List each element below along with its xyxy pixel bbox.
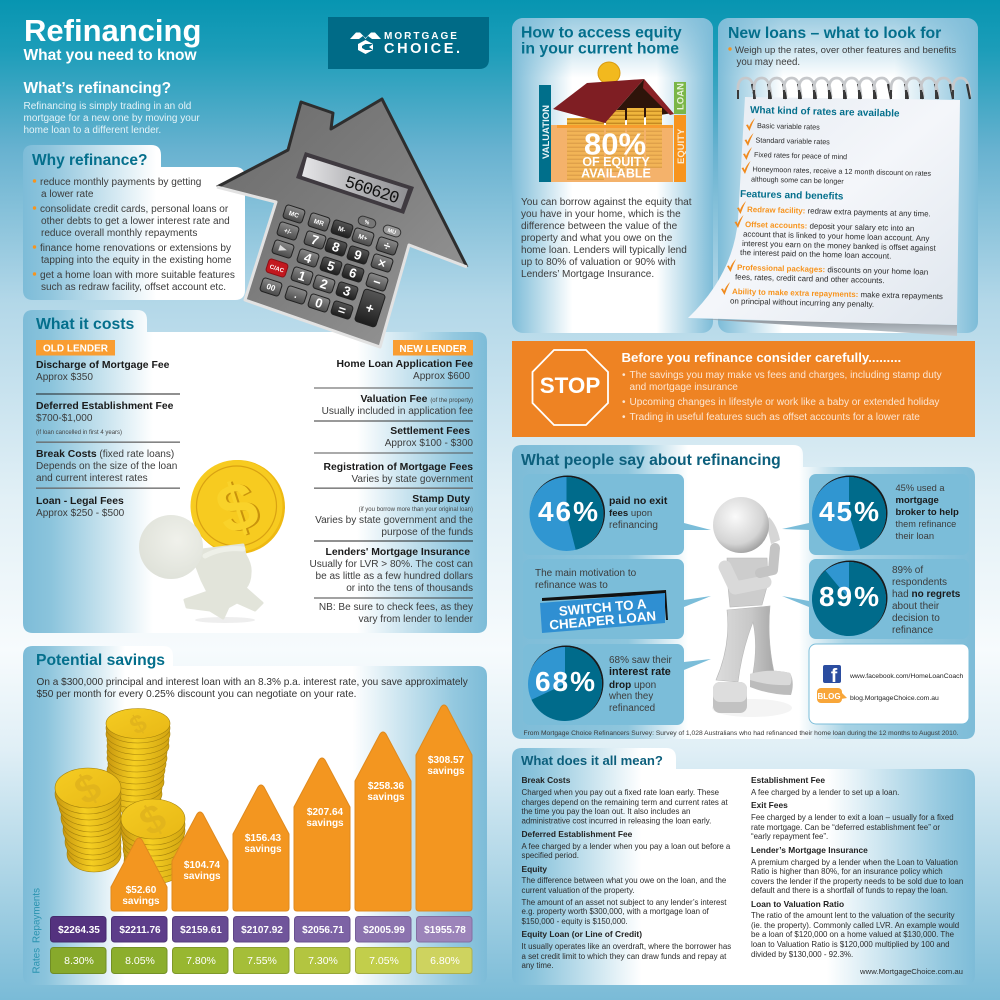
calculator keys: MC	[288, 210, 300, 220]
callout: 46%: fees upon	[609, 508, 652, 519]
new lender column: Valuation Fee (of the property)	[360, 394, 473, 405]
chart labels: savings amounts: savings	[306, 818, 344, 829]
checklist: features and benefits: Ability to make extra repayments: make extra repayments	[732, 287, 943, 301]
panel: what people say	[512, 445, 975, 739]
logo: Mortgage Choice	[328, 17, 489, 69]
old lender column: $700-$1,000	[36, 413, 93, 424]
row: repayments	[50, 916, 472, 942]
row: repayments: $2056.71	[302, 925, 344, 936]
icon: stop sign: STOP	[540, 373, 600, 398]
heading: why refinance: Why refinance?	[32, 152, 147, 169]
calculator keys: M+	[357, 233, 368, 243]
heading: how to access equity	[521, 24, 682, 58]
glossary: right column: (ie. the property). Commonly called LVR. An example would	[751, 921, 959, 930]
text: before you refinance: Trading in useful features such as offset accounts for a lower rate	[630, 412, 920, 423]
text: refinancing definition: home loan to a different lender.	[24, 125, 161, 136]
callout: 68%: drop upon	[609, 680, 656, 691]
calculator keys: 6	[347, 265, 359, 281]
glossary: left column: charges depend on the remaining term and current rates at	[522, 798, 728, 807]
list: reasons to refinance: tapping into the equity in the existing home	[41, 255, 232, 266]
callout: 89%: 89% of	[892, 565, 923, 576]
calculator keys: 2	[318, 276, 330, 292]
text: savings intro: $50 per month for every 0.25% discount you can negotiate on your rate.	[36, 689, 356, 700]
text: savings intro: On a $300,000 principal and interest loan with an 8.3% p.a. interest rate, you save approximately	[36, 677, 469, 688]
glossary: left column: $150,000 - equity is $150,000.	[522, 917, 628, 926]
calculator keys: 5	[325, 258, 337, 274]
text: savings intro	[36, 677, 469, 700]
calculator keys: 00	[265, 282, 277, 293]
row: rates: 7.55%	[247, 955, 277, 967]
chart labels: savings amounts: savings	[183, 871, 221, 882]
checklist: rates available: Basic variable rates	[757, 121, 820, 132]
glossary: right column: Establishment Fee	[751, 775, 825, 785]
calculator keys: ×	[376, 255, 388, 271]
panel: what it costs	[23, 310, 487, 633]
glossary: left column: Charged when you pay out a fixed rate loan early. These	[522, 788, 720, 797]
calculator keys: −	[371, 274, 383, 290]
old lender column: Approx $350	[36, 372, 93, 383]
glossary: right column: divided by $130,000 - 92.3%.	[751, 950, 853, 959]
row: rates: 7.05%	[369, 955, 399, 967]
old lender column: Depends on the size of the loan	[36, 461, 177, 472]
list: reasons to refinance	[33, 177, 235, 293]
glossary: right column: Exit Fees	[751, 800, 788, 810]
new lender column: NB: Be sure to check fees, as they	[319, 602, 473, 613]
coin dollar signs: $	[67, 764, 109, 814]
old lender column	[36, 340, 180, 519]
text: weigh up the rates: Weigh up the rates, over other features and benefits	[735, 45, 956, 56]
row: rates	[50, 948, 472, 974]
logo: Mortgage Choice: CHOICE.	[384, 41, 463, 57]
illustration: house with 80% equity	[539, 62, 687, 182]
title block: What you need to know	[24, 47, 198, 64]
calculator keys: +/-	[283, 227, 292, 236]
chart labels: savings amounts	[122, 755, 465, 907]
text: equity explanation: difference between the value of the	[521, 221, 678, 232]
checklist: rates available: Fixed rates for peace of mind	[754, 150, 847, 161]
list: reasons to refinance: get a home loan with more suitable features	[40, 270, 235, 281]
glossary: left column: a set credit limit to which they can draw funds and repay at	[522, 952, 727, 961]
footnote: survey source: From Mortgage Choice Refinancers Survey: Survey of 1,028 Australians who had refinanced their home loan during the 12 months to August 2010.	[524, 730, 959, 737]
new lender column: or into the tens of thousands	[346, 583, 473, 594]
new lender column: (if you borrow more than your original loan)	[359, 507, 473, 513]
callout: 68%: when they	[608, 691, 653, 702]
chart labels: savings amounts: $104.74	[184, 860, 221, 871]
logo: Mortgage Choice: MORTGAGE	[384, 31, 459, 42]
illustration: house with 80% equity: 80%	[584, 126, 646, 162]
calculator display: 560620	[342, 174, 401, 209]
panel: how to access equity	[512, 18, 713, 333]
callout: 89%: refinance	[892, 625, 934, 636]
calculator keys: MU	[387, 228, 397, 236]
coin dollar signs: $	[124, 707, 152, 741]
glossary: right column: Fee charged by a lender to exit a loan – usually for a fixed	[751, 813, 954, 822]
illustration: house-shaped calculator	[217, 99, 467, 347]
callout: switch to a cheaper loan	[523, 559, 711, 639]
checklist: rates available: Honeymoon rates, receive a 12 month discount on rates	[752, 165, 932, 178]
list: reasons to refinance: finance home renovations or extensions by	[40, 243, 231, 254]
old lender column: Break Costs (fixed rate loans)	[36, 449, 174, 460]
callout: 45%	[782, 474, 969, 555]
new lender column: Varies by state government and the	[315, 515, 473, 526]
new lender column: Lenders' Mortgage Insurance	[325, 547, 470, 558]
glossary: right column: default and there is a shortfall of funds to repay the loan.	[751, 886, 948, 895]
callout: 68%: interest rate	[609, 666, 671, 678]
text: equity explanation: home loan. Lenders will typically lend	[521, 245, 687, 256]
text: before you refinance: •	[622, 397, 626, 408]
calculator keys: MR	[313, 218, 325, 228]
calculator keys	[259, 204, 402, 328]
glossary: right column	[751, 775, 963, 959]
chart labels: savings amounts: $52.60	[126, 885, 157, 896]
callout: 68%: 68% saw their	[609, 655, 672, 666]
new lender column: Stamp Duty	[412, 494, 470, 505]
callout: switch to a cheaper loan: The main motivation to	[535, 568, 637, 579]
icon: blog	[817, 688, 847, 703]
icon: facebook	[823, 665, 841, 687]
callout: 68%	[523, 644, 711, 725]
illustration: figure carrying coin	[139, 460, 285, 623]
glossary: left column: The amount of an asset not subject to any lender’s interest	[522, 898, 727, 907]
text: before you refinance: The savings you may make vs fees and charges, including stamp duty	[630, 370, 942, 381]
glossary: right column: rate mortgage. Can be “deferred establishment fee” or	[751, 823, 940, 832]
callout: 45%: 45% used a	[896, 483, 945, 493]
calculator keys: .	[293, 290, 299, 301]
glossary: left column: Break Costs	[522, 775, 571, 785]
glossary: right column: loan to Valuation Ratio is $120,000 multiplied by 100 and	[751, 940, 950, 949]
callout: 89%: had no regrets	[892, 589, 961, 600]
text: weigh up the rates	[728, 45, 956, 68]
panel: social links: blog.MortgageChoice.com.au	[850, 695, 939, 702]
checklist: features and benefits: Features and benefits	[740, 189, 844, 203]
row: rates: 8.30%	[64, 955, 94, 967]
glossary: left column: the time you pay the loan out. It also includes an	[522, 807, 690, 816]
glossary: right column: Lender’s Mortgage Insurance	[751, 845, 868, 855]
illustration: house with 80% equity: EQUITY	[676, 128, 687, 164]
glossary: right column: Loan to Valuation Ratio	[751, 899, 844, 909]
illustration: house with 80% equity: LOAN	[676, 83, 686, 110]
glossary: right column: covers the lender if the property needs to be sold due to loan	[751, 877, 963, 886]
old lender column: Approx $250 - $500	[36, 508, 125, 519]
text: before you refinance: and mortgage insurance	[630, 382, 738, 393]
calculator keys: 4	[302, 250, 314, 266]
heading: new loans: New loans – what to look for	[728, 25, 941, 42]
illustration: figure carrying coin: $	[207, 466, 267, 550]
heading: potential savings: Potential savings	[36, 652, 165, 669]
calculator keys: =	[336, 302, 348, 318]
new lender column	[309, 340, 474, 625]
checklist: features and benefits: interest you earn on the money banked is offset against	[742, 239, 937, 253]
checklist: features and benefits	[721, 189, 943, 309]
callout: 89%: about their	[892, 601, 940, 612]
checklist: features and benefits: account that is linked to your home loan account. Any	[743, 230, 930, 243]
checklist: features and benefits: on principal without incurring any penalty.	[730, 297, 874, 309]
callout: 68%: 68%	[535, 666, 597, 697]
callout: 46%: refinancing	[609, 520, 658, 531]
checklist: features and benefits: fees, rates, credit card and other accounts.	[735, 273, 885, 285]
row: rates: 7.80%	[186, 955, 216, 967]
checklist: features and benefits: Professional packages: discounts on your home loan	[737, 263, 928, 277]
text: weigh up the rates: you may need.	[736, 57, 800, 68]
heading: what people say: What people say about refinancing	[521, 452, 781, 469]
glossary: left column: administrative cost incurred in releasing the loan early.	[522, 816, 711, 826]
text: before you refinance: Upcoming changes in lifestyle or work like a baby or extended holiday	[630, 397, 939, 408]
glossary: left column: Deferred Establishment Fee	[522, 829, 633, 839]
row: repayments: $2264.35	[58, 925, 100, 936]
callout: 45%: them refinance	[896, 519, 956, 529]
callout: 89%	[782, 559, 969, 639]
list: reasons to refinance: reduce overall monthly repayments	[41, 228, 197, 239]
text: refinancing definition	[24, 101, 200, 136]
new lender column: be as little as a few hundred dollars	[316, 571, 473, 582]
new lender column: Usually included in application fee	[322, 406, 473, 417]
text: before you refinance: •	[622, 370, 626, 381]
text: equity explanation: property and what you owe on the	[521, 233, 673, 244]
text: equity explanation	[521, 197, 692, 280]
calculator keys: %	[363, 219, 370, 227]
panel: why refinance	[23, 145, 245, 300]
old lender column: and current interest rates	[36, 473, 148, 484]
old lender column: Discharge of Mortgage Fee	[36, 360, 170, 371]
axis labels	[32, 888, 42, 974]
glossary: left column: Equity	[522, 864, 547, 874]
list: reasons to refinance: such as redraw facility, offset account etc.	[41, 282, 226, 293]
row: repayments: $2005.99	[363, 925, 405, 936]
axis labels: Rates	[32, 948, 42, 974]
panel: stop warning	[512, 341, 975, 437]
glossary: left column: The difference between what you owe on the loan, and the	[522, 876, 727, 885]
text: equity explanation: up to 80% of valuation or 90% with	[521, 257, 676, 268]
chart labels: savings amounts: $308.57	[428, 755, 465, 766]
notebook rings	[738, 78, 970, 99]
coin dollar signs: $	[132, 795, 174, 845]
new lender column: Approx $100 - $300	[385, 438, 473, 449]
text: refinancing definition: mortgage for a new one by moving your	[24, 113, 200, 124]
row: repayments: $1955.78	[424, 925, 466, 936]
calculator keys: M-	[337, 225, 346, 234]
calculator keys: 1	[296, 268, 308, 284]
callout: 89%: respondents	[892, 577, 947, 588]
callout: 45%: mortgage	[896, 495, 939, 506]
text: before you refinance: Before you refinance consider carefully.........	[622, 350, 901, 365]
heading: what's refinancing: What’s refinancing?	[24, 80, 171, 97]
illustration: house with 80% equity: VALUATION	[541, 105, 552, 159]
calculator keys: ÷	[382, 238, 393, 254]
callout: 45%: 45%	[819, 496, 881, 527]
row: repayments: $2211.76	[119, 925, 161, 936]
illustration: house with 80% equity: AVAILABLE	[581, 166, 651, 180]
checklist: features and benefits: Offset accounts: deposit your salary etc into an	[745, 220, 914, 233]
calculator keys: C/AC	[269, 264, 285, 275]
checklist: features and benefits: Redraw facility: redraw extra payments at any time.	[747, 205, 931, 218]
text: before you refinance: •	[622, 412, 626, 423]
text: refinancing definition: Refinancing is simply trading in an old	[24, 101, 191, 112]
chart labels: savings amounts: $258.36	[368, 781, 405, 792]
illustration: house with 80% equity: OF EQUITY	[582, 155, 650, 169]
chart labels: savings amounts: savings	[244, 844, 282, 855]
calculator keys: 8	[330, 239, 342, 255]
checklist: rates available: although some can be longer	[751, 175, 844, 186]
heading: how to access equity: How to access equity	[521, 24, 682, 42]
coin dollar signs	[67, 707, 174, 845]
checklist: features and benefits: the interest paid on the home loan account.	[740, 248, 891, 261]
new lender column: purpose of the funds	[381, 527, 473, 538]
callout: 89%: decision to	[892, 613, 940, 624]
heading: what does it all mean: What does it all mean?	[521, 753, 663, 768]
axis labels: Repayments	[32, 888, 42, 943]
old lender column: (if loan cancelled in first 4 years)	[36, 430, 122, 436]
glossary: left column: e.g. property worth $300,000, with a mortgage loan of	[522, 907, 710, 916]
heading: how to access equity: in your current home	[521, 40, 679, 58]
list: reasons to refinance: other debts to get a lower interest rate and	[41, 216, 230, 227]
row: repayments: $2159.61	[180, 925, 222, 936]
old lender column: Loan - Legal Fees	[36, 496, 124, 507]
checklist: rates available: What kind of rates are available	[750, 105, 900, 120]
glossary: left column	[522, 775, 731, 970]
row: rates: 6.80%	[430, 955, 460, 967]
callout: switch to a cheaper loan: refinance was to	[535, 580, 608, 591]
panel: social links	[809, 644, 969, 724]
glossary: left column: A fee charged by a lender when you pay a loan out before a	[522, 842, 731, 851]
callout: 46%: 46%	[538, 496, 600, 527]
checklist: rates available: Standard variable rates	[755, 136, 830, 146]
calculator keys: 7	[309, 232, 321, 248]
chart labels: savings amounts: $207.64	[307, 807, 344, 818]
new lender column: Approx $600	[413, 371, 470, 382]
illustration: thinking figure	[712, 497, 793, 717]
new lender column: Home Loan Application Fee	[337, 359, 473, 370]
callout: 45%: broker to help	[896, 507, 959, 518]
glossary: right column: “early repayment fee”.	[751, 832, 828, 841]
illustration: figure carrying coin: $	[210, 466, 269, 550]
row: rates: 7.30%	[308, 955, 338, 967]
title block	[24, 13, 201, 64]
glossary: left column: any time.	[522, 961, 554, 970]
callout: switch to a cheaper loan: SWITCH TO A	[558, 596, 647, 619]
illustration: coin stacks	[55, 708, 185, 884]
calculator keys: 3	[341, 283, 353, 299]
glossary: left column: specified period.	[522, 851, 579, 860]
glossary: right column: be a loan of $120,000 on a home valued at $130,000. The	[751, 930, 955, 939]
calculator keys: 0	[313, 295, 325, 311]
checklist: rates available	[742, 105, 932, 186]
text: equity explanation: Lenders’ Mortgage Insurance.	[521, 269, 654, 280]
illustration: spiral notebook	[688, 78, 970, 336]
new lender column: Registration of Mortgage Fees	[323, 462, 473, 473]
callout: 46%	[523, 474, 711, 555]
glossary: right column: A fee charged by a lender to set up a loan.	[751, 788, 899, 797]
callout: 89%: 89%	[819, 581, 881, 612]
new lender column: Settlement Fees	[390, 426, 470, 437]
callout: 46%: paid no exit	[609, 495, 668, 507]
icon: stop sign	[532, 350, 608, 425]
callout: switch to a cheaper loan: CHEAPER LOAN	[549, 608, 657, 633]
title block: Refinancing	[24, 13, 201, 48]
calculator keys: 9	[352, 247, 364, 263]
chart labels: savings amounts: savings	[122, 896, 160, 907]
text: before you refinance	[622, 350, 942, 423]
glossary: left column: Equity Loan (or Line of Credit)	[522, 929, 642, 939]
calculator keys: +	[364, 299, 376, 317]
heading: what it costs: What it costs	[36, 316, 135, 333]
panel: what does it all mean	[512, 748, 975, 985]
old lender column: OLD LENDER	[43, 344, 109, 354]
glossary: right column: Ratio is higher than 80%, for an insurance policy which	[751, 867, 943, 876]
new lender column: Varies by state government	[351, 474, 473, 485]
list: reasons to refinance: consolidate credit cards, personal loans or	[40, 204, 229, 215]
icon: facebook: f	[831, 666, 838, 687]
glossary: right column: A premium charged by a lender when the Loan to Valuation	[751, 858, 958, 867]
new lender column: vary from lender to lender	[359, 614, 474, 625]
old lender column: Deferred Establishment Fee	[36, 401, 174, 412]
chart labels: savings amounts: savings	[367, 792, 405, 803]
calculator display	[296, 152, 414, 214]
panel: social links: www.facebook.com/HomeLoanCoach	[849, 673, 964, 680]
callout: 68%: refinanced	[609, 703, 655, 714]
row: repayments: $2107.92	[241, 925, 283, 936]
callout: 45%: their loan	[896, 530, 934, 541]
text: equity explanation: you have in your home, which is the	[521, 209, 681, 220]
website address: www.MortgageChoice.com.au	[859, 967, 963, 976]
list: reasons to refinance: a lower rate	[41, 189, 94, 200]
new lender column: NEW LENDER	[399, 344, 467, 355]
icon: blog: BLOG	[817, 692, 841, 701]
panel: new loans	[688, 18, 978, 336]
new lender column: Usually for LVR > 80%. The cost can	[309, 559, 473, 570]
glossary: left column: It usually operates like an overdraft, where the borrower has	[522, 942, 731, 951]
list: reasons to refinance: reduce monthly payments by getting	[40, 177, 201, 188]
chart: savings arrows	[111, 705, 472, 911]
text: equity explanation: You can borrow against the equity that	[521, 197, 692, 208]
row: rates: 8.05%	[125, 955, 155, 967]
panel: potential savings	[23, 646, 487, 985]
chart labels: savings amounts: savings	[427, 766, 465, 777]
glossary: left column: current valuation of the property.	[522, 886, 635, 895]
chart labels: savings amounts: $156.43	[245, 833, 282, 844]
glossary: right column: The ratio of the amount lent to the valuation of the security	[751, 911, 955, 920]
